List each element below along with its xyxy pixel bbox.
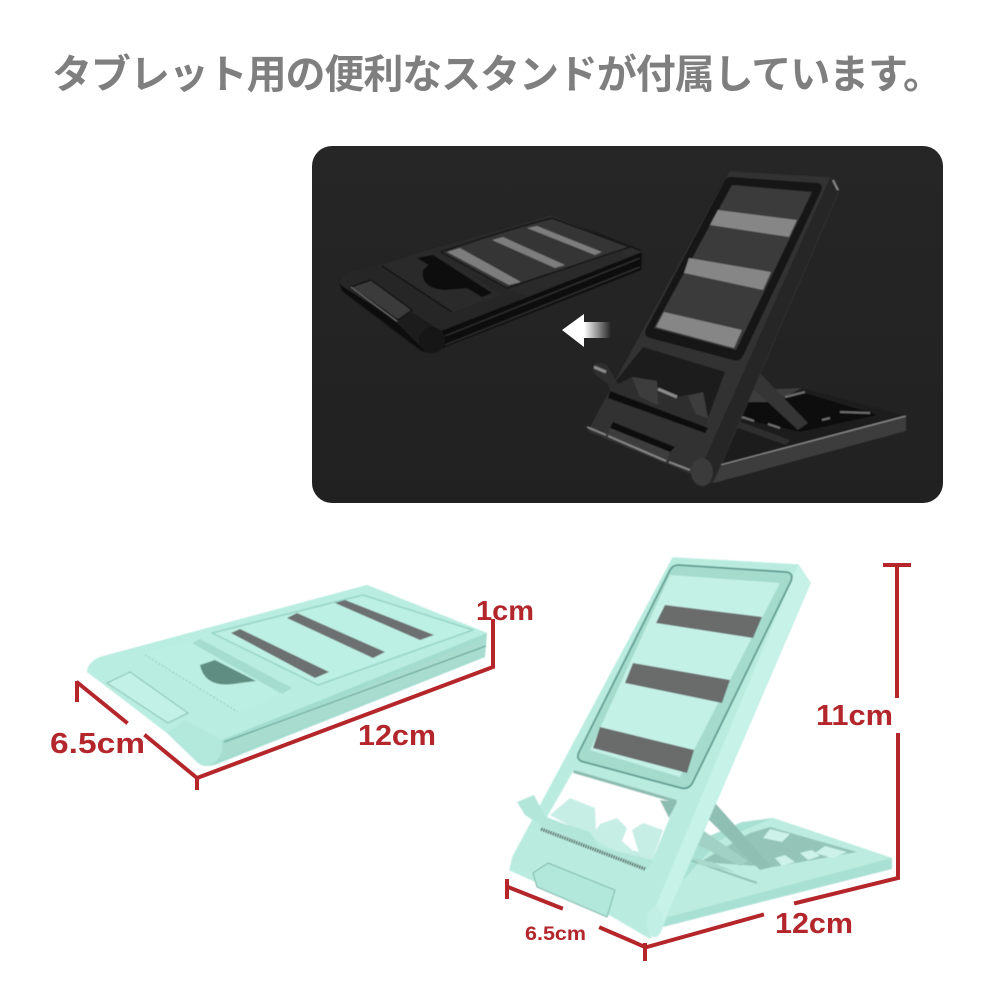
title: タブレット用の便利なスタンドが付属しています。 xyxy=(52,53,943,97)
label: 11cm: 11cm xyxy=(816,700,893,732)
hook and cradle xyxy=(593,363,708,430)
panel background xyxy=(312,146,943,503)
label: 12cm: 12cm xyxy=(358,720,436,752)
panel: black stand photo xyxy=(312,146,943,503)
label: 6.5cm: 6.5cm xyxy=(50,728,145,760)
window xyxy=(615,347,725,418)
screen recess xyxy=(645,177,822,360)
hook and comb xyxy=(517,795,653,870)
screen pad xyxy=(212,595,473,685)
front plate xyxy=(589,172,839,486)
label: 6.5cm: 6.5cm xyxy=(525,924,586,945)
illustration: open mint stand xyxy=(510,558,892,938)
stand body xyxy=(87,585,487,766)
hinge xyxy=(610,422,675,452)
dimension lines: folded stand xyxy=(50,595,534,788)
hinge knob xyxy=(647,907,663,937)
base xyxy=(700,388,906,483)
screen recess xyxy=(578,565,792,788)
illustration: folded mint stand xyxy=(87,585,487,766)
arrow pointing left xyxy=(562,314,611,347)
grey bars xyxy=(656,605,762,638)
open black stand xyxy=(587,172,906,486)
label: 1cm: 1cm xyxy=(476,595,534,626)
hinge xyxy=(533,863,615,917)
prop strut xyxy=(697,795,772,870)
hinge knob xyxy=(691,458,713,486)
base xyxy=(660,818,892,927)
label: 12cm: 12cm xyxy=(775,908,853,940)
grey bars xyxy=(231,629,329,678)
dimension lines: open stand xyxy=(507,565,909,959)
folded black stand xyxy=(339,215,642,353)
kick panel xyxy=(145,638,292,713)
hinge xyxy=(107,672,188,723)
window xyxy=(547,770,677,858)
front plate xyxy=(510,558,810,938)
